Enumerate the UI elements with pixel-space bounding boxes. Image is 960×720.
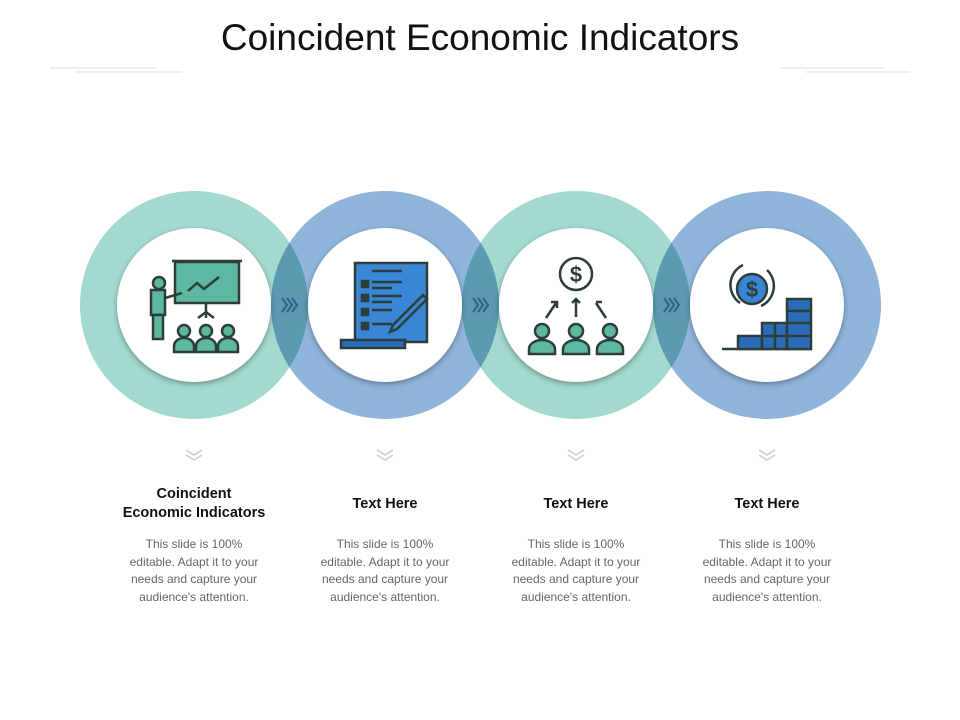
- text block 3: audience's attention.: [521, 590, 631, 604]
- text block 3: This slide is 100%: [528, 537, 624, 551]
- text block 3: [512, 496, 640, 604]
- text block 4: Text Here: [734, 496, 800, 512]
- text block 4: needs and capture your: [704, 572, 830, 586]
- text block 4: audience's attention.: [712, 590, 822, 604]
- text block 3: needs and capture your: [513, 572, 639, 586]
- icon: money growth: [722, 265, 812, 349]
- icon: checklist: [341, 263, 427, 348]
- text block 1: audience's attention.: [139, 590, 249, 604]
- text block 4: [703, 496, 832, 604]
- text block 1: This slide is 100%: [146, 537, 242, 551]
- ring circles: [80, 191, 881, 419]
- text block 2: needs and capture your: [322, 572, 448, 586]
- text block 1: needs and capture your: [131, 572, 257, 586]
- text block 1: [123, 486, 265, 604]
- text block 1: Coincident: [157, 486, 231, 502]
- icon: presentation: [151, 261, 242, 352]
- text block 2: editable. Adapt it to your: [321, 554, 449, 568]
- text block 1: Economic Indicators: [123, 505, 265, 521]
- text block 2: Text Here: [352, 496, 418, 512]
- text block 2: audience's attention.: [330, 590, 440, 604]
- text block 3: Text Here: [543, 496, 608, 512]
- arrows between circles: [282, 298, 679, 312]
- text block 2: This slide is 100%: [337, 537, 433, 551]
- icon: people dollar: [529, 258, 623, 354]
- icon: people dollar: $: [570, 262, 582, 287]
- text block 4: editable. Adapt it to your: [703, 554, 831, 568]
- text block 1: editable. Adapt it to your: [130, 554, 258, 568]
- text block 3: editable. Adapt it to your: [512, 554, 640, 568]
- icon: money growth: $: [746, 277, 758, 302]
- text block 4: This slide is 100%: [719, 537, 815, 551]
- title: Coincident Economic Indicators: [221, 17, 739, 58]
- down chevrons: [186, 450, 775, 460]
- text block 2: [321, 496, 450, 604]
